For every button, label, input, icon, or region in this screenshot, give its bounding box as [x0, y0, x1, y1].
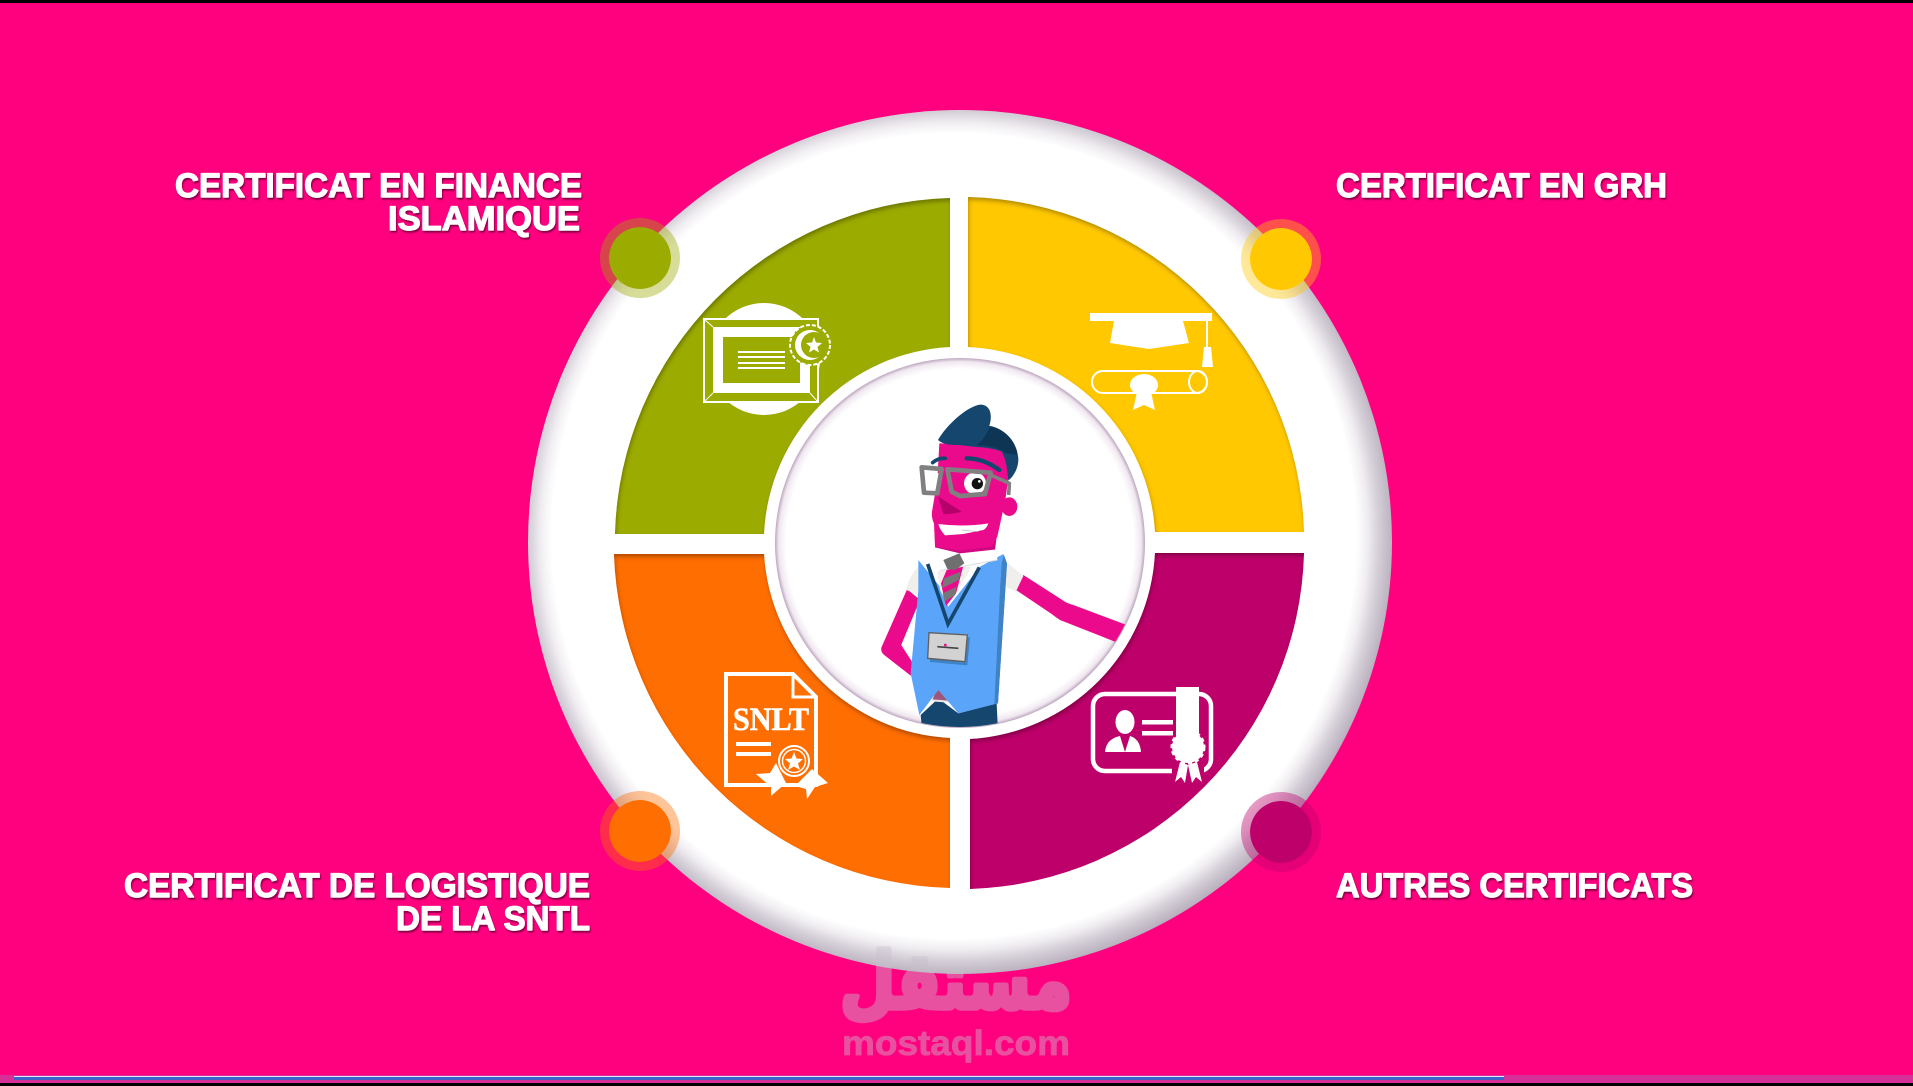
- character: [882, 405, 1127, 729]
- SNLT label: SNLT: [733, 702, 809, 738]
- heading: GRH: CERTIFICAT EN GRH: [1336, 167, 1667, 205]
- icon: graduation cap and diploma: [1090, 313, 1213, 410]
- dot: purple: [1246, 796, 1316, 868]
- outer white ring: [528, 110, 1392, 974]
- panel: orange quadrant: [614, 554, 950, 888]
- belt: [932, 690, 948, 701]
- nose: [938, 497, 962, 514]
- icon: SNLT document: [726, 674, 828, 799]
- mouth: [938, 523, 988, 535]
- bottom strip: [0, 1075, 1913, 1083]
- dot: yellow: [1246, 224, 1316, 294]
- neck: [935, 537, 997, 554]
- ear: [1001, 497, 1017, 516]
- eyes: [936, 473, 938, 489]
- tie: [941, 563, 964, 606]
- glasses: [922, 467, 1009, 496]
- sleeves: [906, 568, 918, 596]
- heading: autres: AUTRES CERTIFICATS: [1336, 867, 1693, 905]
- right arm: [1016, 575, 1127, 642]
- heading: logistique: [124, 867, 590, 938]
- vest: [911, 554, 1007, 715]
- heading: finance: CERTIFICAT EN FINANCE: [175, 167, 582, 205]
- shirt front: [937, 567, 972, 607]
- eyebrows: [967, 458, 999, 470]
- heading: logistique: DE LA SNTL: [396, 900, 590, 938]
- tie knot: [943, 553, 964, 570]
- heading: finance: [175, 167, 582, 238]
- icon: olive certificate with crescent seal: [704, 303, 830, 415]
- collar: [935, 547, 998, 569]
- centre disc: [775, 358, 1145, 728]
- trousers: [920, 702, 998, 727]
- watermark: مستقل: [840, 936, 1072, 1027]
- icon: ID card certificate: [1093, 687, 1211, 783]
- heading: finance: ISLAMIQUE: [388, 200, 580, 238]
- hair: [938, 405, 1018, 481]
- panel: purple quadrant: [970, 553, 1304, 889]
- watermark: mostaql.com: [842, 1024, 1070, 1063]
- dot: orange: [604, 796, 676, 866]
- dot: olive: [604, 222, 676, 294]
- panel: yellow quadrant: [968, 197, 1304, 532]
- badge: [930, 635, 970, 665]
- heading: logistique: CERTIFICAT DE LOGISTIQUE: [124, 867, 590, 905]
- head: [932, 443, 1010, 551]
- lanyard: [928, 564, 979, 624]
- panel: olive quadrant: [615, 198, 950, 534]
- left arm: [882, 590, 919, 675]
